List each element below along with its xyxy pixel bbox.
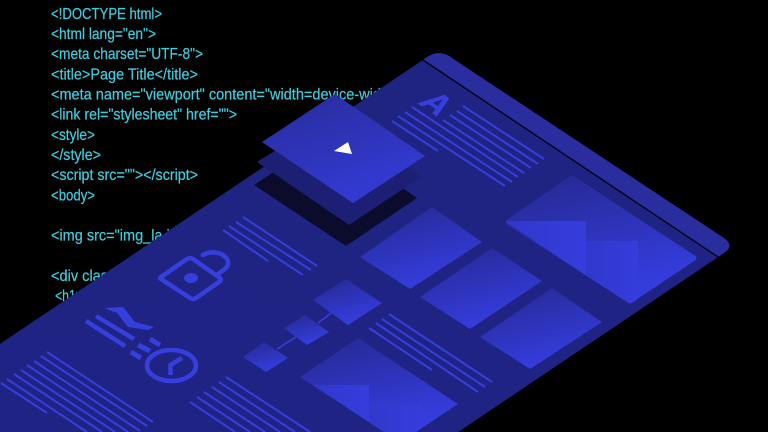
- icon: clock: [147, 350, 196, 381]
- code listing: <!DOCTYPE html>: [51, 6, 162, 23]
- heading icon: letter A: A: [410, 86, 462, 121]
- text lines: centre: [223, 217, 317, 275]
- code listing: </style>: [51, 147, 101, 164]
- code listing: <meta name="viewport" content="width=device-width: [51, 86, 393, 104]
- icon: padlock: [160, 252, 228, 299]
- play triangle: [334, 142, 352, 154]
- lower image card: [300, 338, 458, 432]
- text lines: beside flow: [369, 314, 492, 392]
- hero image card: [505, 178, 694, 302]
- code listing: <h1>: [55, 288, 83, 305]
- content cards: [360, 207, 602, 369]
- code listing: <style>: [51, 127, 95, 144]
- icon: chevron and lines: [86, 307, 160, 358]
- hero image shapes: [505, 221, 586, 275]
- lower image shapes: [313, 385, 369, 422]
- code listing: <meta charset="UTF-8">: [51, 46, 203, 63]
- header divider: [423, 60, 718, 257]
- code listing: <div class=": [51, 268, 129, 285]
- code listing: <title>Page Title</title>: [51, 66, 198, 84]
- text lines under heading: [392, 106, 544, 186]
- code listing: <body>: [51, 188, 95, 204]
- flow diagram: [243, 279, 382, 372]
- code listing: <script src=""></script>: [51, 167, 198, 184]
- code listing: <link rel="stylesheet" href="">: [51, 106, 237, 124]
- code listing: <html lang="en">: [51, 26, 156, 43]
- code listing: <img src="img_la.jpg": [51, 228, 191, 244]
- code listing: [51, 6, 393, 305]
- text lines: bottom left: [1, 352, 153, 432]
- stacked layers with play icon: [254, 94, 425, 246]
- text lines: bottom centre: [190, 377, 310, 432]
